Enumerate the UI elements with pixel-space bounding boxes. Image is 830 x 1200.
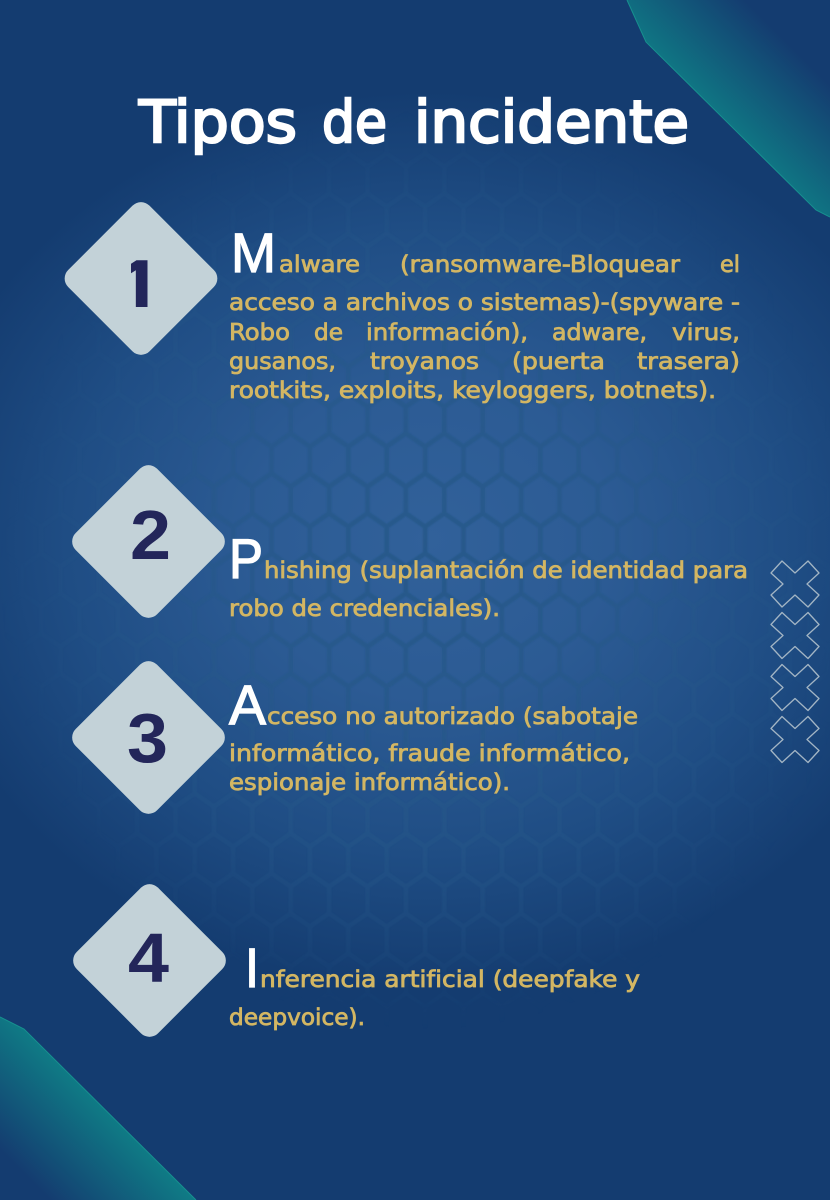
text block 1: troyanos [370,349,479,375]
text block 3 [229,673,638,796]
title: de [322,88,387,156]
title [138,88,689,156]
text block 1: trasera) [637,349,740,375]
item 4: inferencia artificial [68,879,640,1042]
decorative corner: top right [627,0,830,217]
text block 1: rootkits, exploits, keyloggers, botnets). [229,378,716,404]
text block 3: informático, fraude informático, [229,741,630,767]
text block 1: gusanos, [229,349,336,375]
number diamond 2 [67,460,230,623]
text block 1: (ransomware-Bloquear [400,252,681,278]
text block 4: nferencia artificial (deepfake y [260,967,640,993]
number diamond 3: 3 [127,699,168,777]
text block 3: cceso no autorizado (sabotaje [267,704,638,730]
text block 1: acceso a archivos o sistemas)-(spyware - [229,290,740,316]
text block 1 [229,221,740,404]
number diamond 2: 2 [130,496,171,574]
text block 2: hishing (suplantación de identidad para [264,558,748,584]
text block 2: robo de credenciales). [229,596,500,622]
text block 1: adware, [552,320,647,346]
number diamond 3 [67,656,230,819]
text block 3: espionaje informático). [229,770,510,796]
item 1: malware [60,197,740,404]
text block 4: I [245,936,259,999]
number diamond 1: 1 [116,243,163,338]
number diamond 1 [64,202,218,355]
text block 1: (puerta [512,349,605,375]
text block 1: virus, [672,320,740,346]
number diamond 4: 4 [128,919,169,997]
text block 2 [229,527,748,622]
text block 1: alware [279,252,360,278]
title: Tipos [138,88,297,156]
text block 2: P [229,527,263,590]
number diamond 4 [68,879,231,1042]
text block 1: el [720,252,740,278]
text block 4: deepvoice). [229,1005,365,1031]
background [0,139,830,958]
text block 1: de [314,320,343,346]
text block 1: Robo [229,320,290,346]
text block 1: M [231,221,276,284]
decorative x marks [771,561,819,762]
text block 4 [229,936,640,1031]
decorative corner: bottom left [0,1017,196,1200]
text block 1: información), [366,320,528,346]
text block 3: A [229,673,267,736]
item 3: acceso no autorizado [67,656,638,819]
item 2: phishing [67,460,748,623]
title: incidente [414,88,689,156]
